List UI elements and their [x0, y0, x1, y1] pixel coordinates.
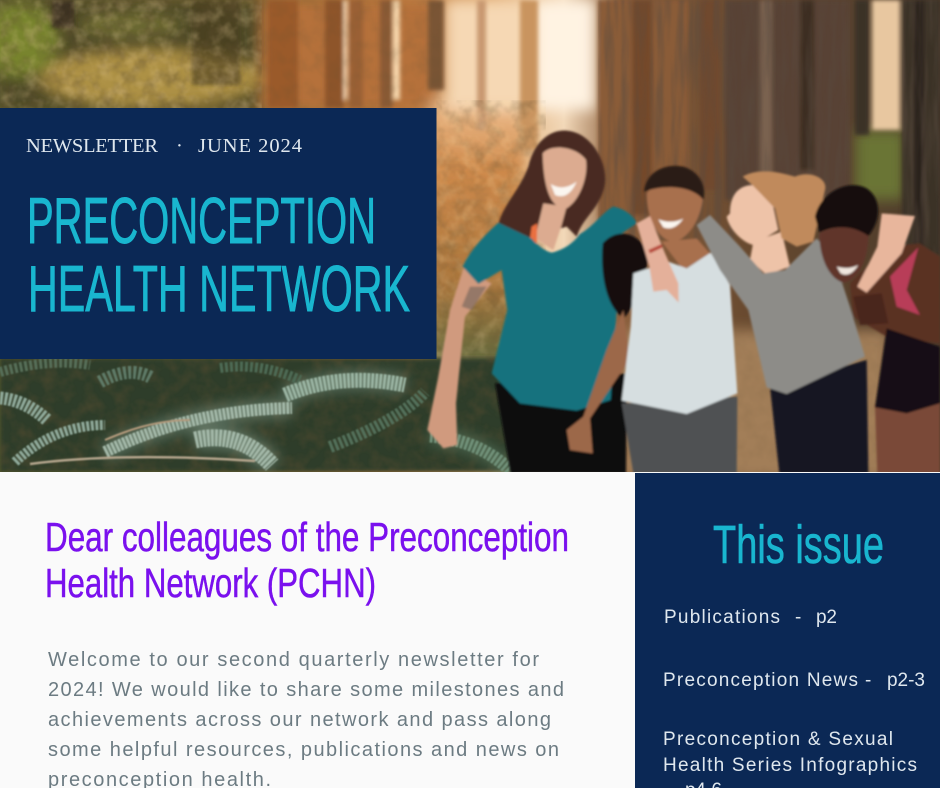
date line: ·	[176, 135, 183, 157]
contents list: p2-3	[887, 670, 925, 691]
date line: NEWSLETTER	[26, 135, 158, 157]
hero photo: forest with four laughing women	[0, 0, 940, 480]
greeting heading: Health Network (PCHN)	[45, 560, 376, 606]
title	[27, 184, 410, 325]
contents list: p2	[816, 607, 837, 628]
masthead panel	[0, 108, 436, 359]
contents list: Health Series Infographics	[663, 755, 917, 776]
contents list: Preconception News	[663, 670, 858, 691]
contents panel	[635, 473, 940, 788]
welcome text: 2024! We would like to share some milestones and	[48, 679, 564, 701]
woman in white shirt	[567, 166, 737, 473]
welcome text: Welcome to our second quarterly newsletter for	[48, 649, 539, 671]
woman in teal shirt	[427, 131, 637, 473]
date line	[26, 135, 302, 157]
greeting heading	[45, 514, 569, 606]
date line: JUNE 2024	[198, 135, 302, 157]
contents list: -	[795, 607, 801, 628]
contents list: Publications	[664, 607, 780, 628]
contents list	[663, 607, 925, 788]
woman in dark shorts	[815, 185, 940, 473]
woman in grey shirt	[697, 171, 868, 473]
greeting heading: Dear colleagues of the Preconception	[45, 514, 569, 560]
four women	[427, 131, 940, 473]
fern undergrowth	[0, 358, 515, 472]
contents list: Preconception & Sexual	[663, 729, 893, 750]
welcome text: achievements across our network and pass along	[48, 709, 551, 731]
title: HEALTH NETWORK	[28, 252, 410, 325]
forest background	[0, 0, 940, 480]
contents list: -	[865, 670, 871, 691]
welcome text	[48, 649, 564, 788]
welcome text: some helpful resources, publications and news on	[48, 739, 559, 761]
letter panel	[0, 473, 635, 788]
title: PRECONCEPTION	[27, 184, 376, 257]
